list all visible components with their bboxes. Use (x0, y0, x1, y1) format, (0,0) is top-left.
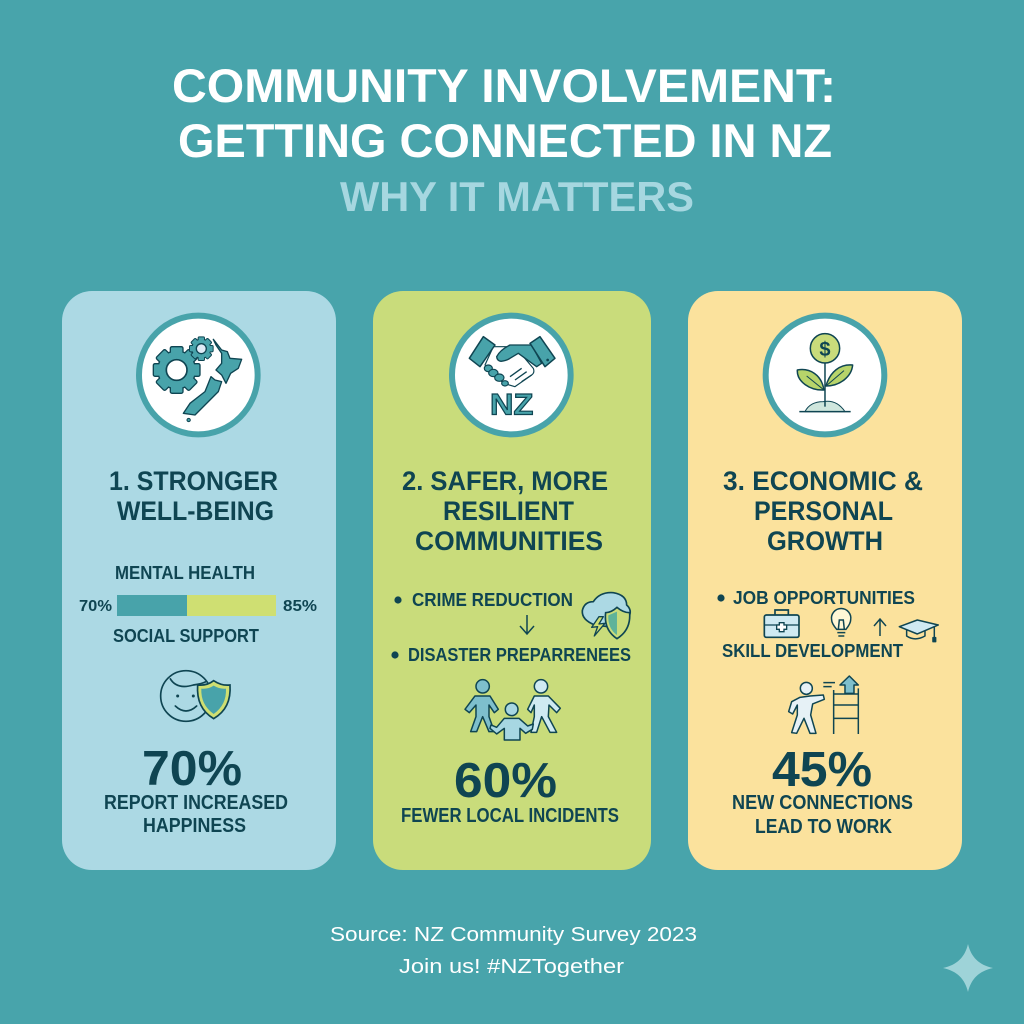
label: skill development: SKILL DEVELOPMENT (722, 641, 903, 661)
panel: stronger well-being (62, 291, 336, 870)
heading: GROWTH (767, 526, 883, 556)
stat caption: HAPPINESS (143, 815, 246, 837)
bar chart: 70% (79, 598, 112, 615)
stat caption (104, 792, 288, 837)
icon: money plant (766, 316, 884, 434)
heading: RESILIENT (443, 496, 574, 526)
icon: smiling face with shield (161, 671, 230, 721)
footer: source and hashtag: Source: NZ Community Survey 2023 (330, 924, 697, 946)
heading: 1. STRONGER (109, 466, 278, 496)
stat caption: NEW CONNECTIONS (732, 792, 913, 814)
bar chart: 85% (283, 598, 317, 615)
heading: 3. ECONOMIC & (723, 466, 923, 496)
icon: money plant: $ (819, 339, 831, 361)
icon: person climbing ladder (789, 676, 858, 734)
label: social support: SOCIAL SUPPORT (113, 626, 259, 646)
bullet list (391, 590, 631, 665)
heading: 2. SAFER, MORE (402, 466, 608, 496)
bullet list: DISASTER PREPARRENEES (408, 645, 631, 665)
heading (109, 466, 278, 526)
heading: PERSONAL (754, 496, 893, 526)
icon: gears and NZ map (139, 316, 258, 434)
panel: economic and personal growth (688, 291, 962, 870)
title: GETTING CONNECTED IN NZ (178, 114, 832, 167)
label: mental health: MENTAL HEALTH (115, 563, 255, 583)
icon: briefcase (764, 610, 799, 637)
icon: light bulb (831, 609, 851, 636)
title: COMMUNITY INVOLVEMENT: (172, 59, 836, 112)
stat: 60% (454, 754, 557, 808)
icon: graduation cap (899, 620, 938, 642)
stat caption: LEAD TO WORK (755, 816, 892, 838)
heading: COMMUNITIES (415, 526, 603, 556)
list: job opportunities: JOB OPPORTUNITIES (733, 588, 915, 608)
subtitle: WHY IT MATTERS (340, 173, 694, 220)
icon: handshake NZ (452, 316, 571, 434)
panel: safer communities (373, 291, 651, 870)
title (172, 59, 836, 167)
icon: handshake NZ: NZ (490, 388, 533, 421)
stat caption: FEWER LOCAL INCIDENTS (401, 805, 619, 827)
stat: 45% (772, 743, 872, 797)
footer: source and hashtag (330, 924, 697, 978)
footer: source and hashtag: Join us! #NZTogether (399, 956, 624, 978)
bar chart (79, 595, 317, 616)
icon: family (465, 680, 560, 740)
icon: sparkle (943, 944, 993, 992)
heading (723, 466, 923, 556)
heading (402, 466, 608, 556)
icon: storm cloud with shield (582, 593, 630, 639)
stat caption (732, 792, 913, 838)
arrow up (874, 619, 886, 636)
bullet list: CRIME REDUCTION (412, 590, 573, 610)
heading: WELL-BEING (117, 496, 274, 526)
stat: 70% (142, 742, 242, 796)
stat caption: REPORT INCREASED (104, 792, 288, 814)
